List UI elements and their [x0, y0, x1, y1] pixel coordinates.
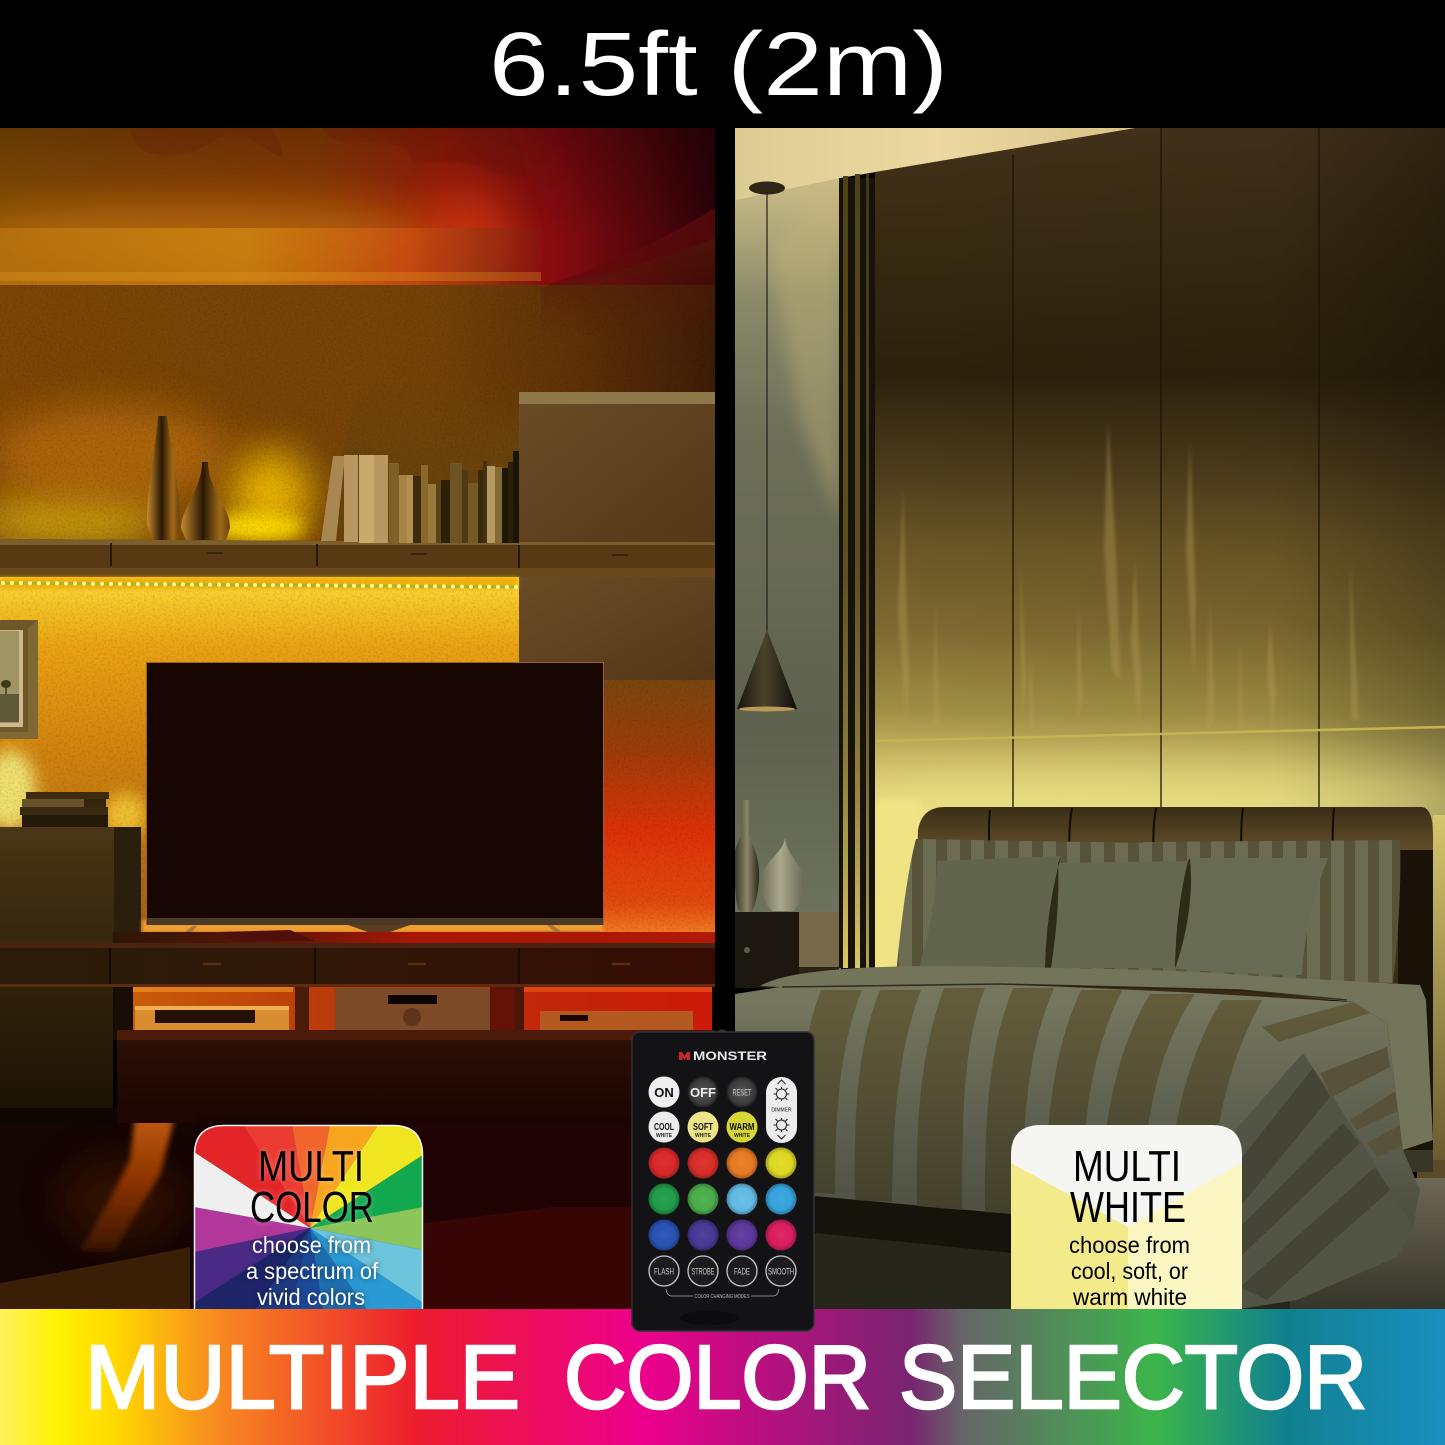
banner text: COLOR: [564, 1328, 871, 1428]
amplifier centre: [335, 988, 490, 1031]
brand logo: MONSTER: [693, 1051, 768, 1063]
right wall with red glow: [600, 678, 715, 934]
dimmer control: [766, 1077, 797, 1143]
description: choose from: [252, 1232, 371, 1258]
colour buttons: [648, 1148, 796, 1250]
mode labels: FLASH: [654, 1266, 674, 1276]
picture frame: [0, 620, 38, 739]
mode labels: [654, 1266, 794, 1276]
wall above shelf: [0, 238, 715, 546]
colour changing modes legend: [666, 1289, 779, 1300]
player right: [540, 1011, 693, 1031]
banner text: SELECTOR: [899, 1328, 1367, 1428]
duvet fold: [760, 966, 1433, 1150]
round vase: [181, 462, 230, 540]
panel: living room with amber and red lighting: [0, 128, 715, 1309]
console drawers: [0, 948, 715, 987]
wall texture: [0, 285, 715, 935]
rug left: [0, 1247, 190, 1309]
bedspread stripes: [797, 988, 1370, 1262]
bedspread overhang: [1190, 1053, 1413, 1309]
warm white button: [726, 1112, 758, 1142]
plinth shadow over reflection: [117, 1108, 178, 1123]
rug: [735, 1150, 1445, 1309]
description: choose from: [1069, 1232, 1190, 1258]
wall below shelf with strip glow: [0, 575, 520, 940]
bedspread: [735, 984, 1420, 1265]
power buttons: [648, 1076, 758, 1142]
headboard: [912, 807, 1433, 1160]
colour changing modes legend: COLOR CHANGING MODES: [694, 1294, 750, 1300]
pendant lamp: [737, 182, 797, 712]
heading: WHITE: [1070, 1183, 1186, 1232]
heading: [1070, 1142, 1186, 1232]
badge: multi color: [194, 1125, 423, 1310]
badge: multi white: [1011, 1125, 1242, 1310]
heading: COLOR: [250, 1183, 374, 1232]
brand logo: [679, 1051, 768, 1063]
warm white button: WARM: [730, 1122, 754, 1133]
dimmer control: DIMMER: [771, 1108, 792, 1114]
TV console top: [0, 930, 715, 948]
cool white button: COOL: [654, 1122, 674, 1133]
stack of books on cabinet: [20, 792, 109, 829]
LED light strip: [0, 577, 518, 589]
left wall: [735, 128, 841, 988]
television: [142, 662, 604, 941]
heading: MULTI: [1073, 1142, 1181, 1191]
left cabinet: [0, 827, 141, 943]
rug right: [424, 1207, 640, 1309]
soft white button: SOFT: [693, 1122, 713, 1133]
title: 6.5ft (2m): [489, 15, 948, 115]
nightstand: [735, 912, 839, 988]
upper cabinet: [519, 392, 715, 545]
striped pillows: [896, 839, 1400, 983]
badge outline: [194, 1126, 422, 1310]
warm white button: WHITE: [734, 1133, 751, 1139]
console plinth: [117, 1040, 632, 1123]
throw pillows: [919, 856, 1328, 975]
colour wheel: [194, 1125, 423, 1310]
heading: [250, 1142, 374, 1232]
banner text: [85, 1328, 1367, 1428]
divider: [715, 128, 735, 1309]
side stripes: [1320, 1047, 1404, 1157]
soft white button: [688, 1112, 718, 1142]
mode labels: FADE: [734, 1266, 750, 1276]
off button: OFF: [690, 1085, 716, 1100]
reset button: RESET: [732, 1088, 752, 1098]
heading: MULTI: [258, 1142, 364, 1191]
remote body: [632, 1029, 814, 1331]
lower wall cabinet: [519, 577, 715, 680]
ceiling: [735, 128, 1136, 200]
description: [246, 1232, 378, 1310]
tri-tone white background: [1011, 1125, 1242, 1310]
floor with reflections: [0, 1108, 632, 1309]
description: cool, soft, or: [1071, 1258, 1188, 1284]
panel: bedroom with white lighting: [735, 128, 1445, 1309]
cool white button: [648, 1112, 680, 1142]
receiver left: [135, 1006, 289, 1032]
fold shadow line: [782, 984, 1347, 1000]
console niche with glowing components: [0, 987, 715, 1108]
books on shelf: [321, 451, 519, 543]
on button: ON: [654, 1085, 674, 1100]
mode buttons: [649, 1256, 796, 1286]
wall panels: [840, 128, 1445, 990]
lower glow above bed: [840, 765, 1445, 825]
description: a spectrum of: [246, 1258, 378, 1284]
mode labels: STROBE: [692, 1266, 714, 1276]
tall vase: [147, 416, 179, 540]
fluted column: [839, 174, 875, 968]
ceiling: [0, 128, 715, 295]
description: [1069, 1232, 1190, 1310]
remote control: [632, 1029, 814, 1331]
description: warm white: [1072, 1284, 1187, 1310]
description: vivid colors: [257, 1284, 365, 1310]
shelf: [0, 539, 715, 577]
dark vase: [735, 800, 759, 912]
mode labels: SMOOTH: [768, 1266, 794, 1276]
rainbow banner: [0, 1309, 1445, 1445]
glow streaks: [898, 420, 1359, 735]
cool white button: WHITE: [656, 1133, 673, 1139]
banner text: MULTIPLE: [85, 1328, 520, 1428]
cornice moulding: [0, 208, 715, 285]
soft white button: WHITE: [695, 1133, 712, 1139]
pale vase: [761, 838, 804, 911]
wall right of headboard: [1433, 815, 1445, 1160]
panel seams: [1013, 128, 1319, 815]
bed base shadow: [735, 1180, 1240, 1290]
